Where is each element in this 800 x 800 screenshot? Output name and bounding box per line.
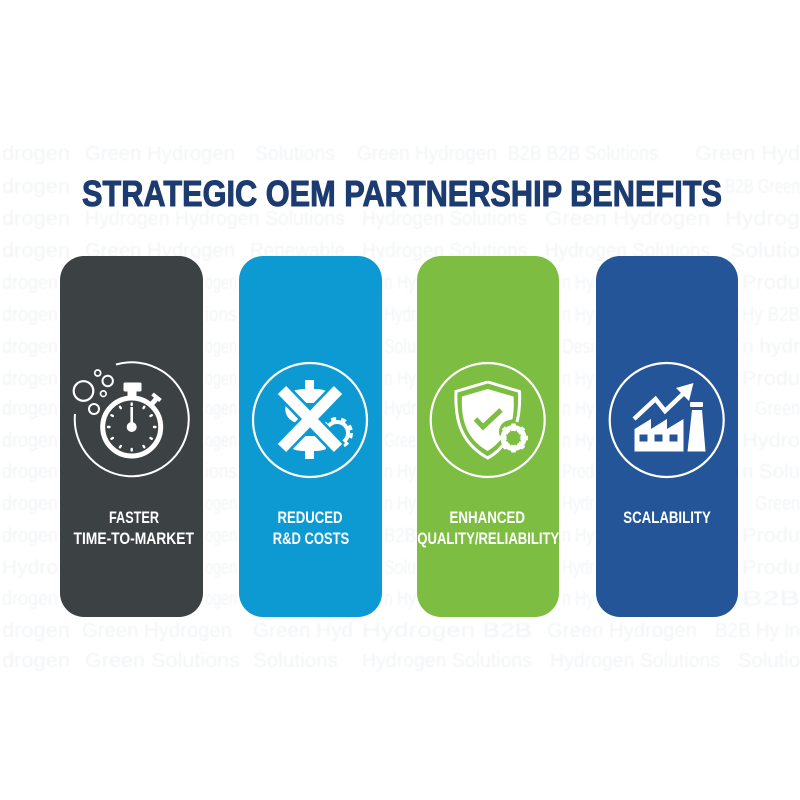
watermark background text: Solutions: [255, 143, 335, 165]
watermark background text: drogen: [2, 304, 58, 326]
watermark background text: n Hy: [562, 525, 594, 547]
watermark background text: n Hy: [384, 588, 416, 610]
watermark background text: Solutio: [738, 650, 800, 672]
label line 2: TIME-TO-MARKET: [74, 530, 194, 548]
watermark background text: n Hy: [562, 304, 594, 326]
watermark background text: drogen: [2, 525, 58, 547]
icon: crossed-out coin and gear: [253, 363, 367, 477]
watermark background text: n Hy: [562, 368, 594, 390]
watermark background text: ogen: [205, 398, 237, 420]
watermark background text: B2B: [742, 588, 800, 610]
watermark background text: Prod: [562, 461, 594, 483]
cross bars outline: [281, 389, 339, 449]
watermark background text: drogen: [2, 336, 58, 358]
panel: scalability: [596, 256, 738, 617]
watermark background text: Green Solutions: [85, 650, 240, 672]
watermark background text: ogen: [205, 272, 237, 294]
label line 2: R&D COSTS: [273, 530, 349, 548]
watermark background text: ogen: [205, 368, 237, 390]
watermark background text: drogen: [2, 368, 58, 390]
watermark background text: Hydrogen Solutions: [362, 208, 527, 230]
watermark background text: Hydrogen Solutions: [550, 650, 720, 672]
watermark background text: ions: [205, 304, 237, 326]
watermark background text: drogen: [2, 240, 70, 262]
watermark background text: Green Hyd: [695, 143, 800, 165]
watermark background text: Hydrogen Hydrogen Solutions: [85, 208, 345, 230]
panel: enhanced quality/reliability: [417, 256, 559, 617]
watermark background text: Hydr: [562, 493, 594, 515]
watermark background text: Hydrogen B2B: [362, 620, 532, 642]
watermark background text: n Solu: [742, 461, 800, 483]
watermark background text: drogen: [2, 143, 70, 165]
card background: dark grey: [60, 256, 203, 617]
watermark background text: ogen: [205, 557, 237, 579]
watermark background text: Green Hydrogen: [82, 620, 232, 642]
watermark background text: drogen: [2, 620, 70, 642]
watermark background text: Gree: [384, 430, 416, 452]
watermark background text: n Hy: [384, 461, 416, 483]
small gear: [323, 419, 351, 447]
watermark background text: Green Hydrogen: [357, 143, 497, 165]
watermark background text: drogen: [2, 650, 70, 672]
icon: factory and rising arrow: [610, 363, 724, 477]
watermark background text: ogen: [205, 430, 237, 452]
icon: shield with check and gear: [431, 363, 545, 477]
label line 2: QUALITY/RELIABILITY: [417, 530, 559, 548]
watermark background text: ogen: [205, 493, 237, 515]
watermark background text: drogen: [2, 272, 58, 294]
watermark background text: Green Hydrogen: [85, 240, 235, 262]
label: ENHANCED: [450, 509, 525, 527]
watermark background text: Produ: [742, 525, 800, 547]
watermark background text: Solutions: [253, 650, 338, 672]
cross bars: [282, 390, 338, 448]
watermark background text: n Hy: [562, 588, 594, 610]
watermark background text: Hydrogen Solutions: [362, 240, 527, 262]
bottom coin piece: [293, 436, 326, 459]
watermark background text: drogen: [2, 176, 70, 198]
label: FASTER: [109, 509, 159, 527]
watermark background text: Hydrogen Solutions: [545, 240, 710, 262]
watermark background text: Hydrogen Solutions: [362, 650, 532, 672]
card background: blue: [239, 256, 382, 617]
watermark background text: Solu: [384, 336, 416, 358]
label: SCALABILITY: [623, 509, 711, 527]
watermark background text: Produ: [742, 368, 800, 390]
card background: green: [417, 256, 559, 617]
watermark background text: Hydro: [2, 557, 58, 579]
watermark background text: drogen: [2, 493, 58, 515]
watermark background text: Hydr: [562, 557, 594, 579]
panel: reduced R&D costs: [239, 256, 382, 617]
watermark background text: [2, 143, 800, 672]
watermark background text: Hydr: [384, 304, 416, 326]
watermark background text: Green Hydrogen: [547, 620, 697, 642]
watermark background text: ogen: [205, 588, 237, 610]
watermark background text: Solu: [384, 557, 416, 579]
watermark background text: n Hy: [384, 368, 416, 390]
watermark background text: B2B B2B Solutions: [508, 143, 658, 165]
left coin piece: [285, 405, 300, 423]
watermark background text: n Hy: [562, 272, 594, 294]
watermark background text: Green Hydrogen: [545, 208, 710, 230]
watermark background text: ogen: [205, 336, 237, 358]
icon: stopwatch with bubbles: [74, 362, 189, 476]
watermark background text: B2B: [384, 525, 416, 547]
watermark background text: Hydrog: [725, 208, 800, 230]
watermark background text: drogen: [2, 461, 58, 483]
watermark background text: Hydro: [742, 430, 800, 452]
watermark background text: Desi: [562, 336, 594, 358]
watermark background text: Green Hydrogen: [85, 143, 235, 165]
watermark background text: ions: [205, 461, 237, 483]
watermark background text: drogen: [2, 588, 58, 610]
watermark background text: n Hy: [562, 430, 594, 452]
watermark background text: Solutio: [730, 240, 800, 262]
label: REDUCED: [278, 509, 343, 527]
watermark background text: Produ: [742, 272, 800, 294]
watermark background text: n hydr: [742, 336, 800, 358]
watermark background text: Renewable: [250, 240, 345, 262]
top coin piece: [293, 380, 326, 403]
watermark background text: n Hy: [384, 493, 416, 515]
watermark background text: drogen: [2, 398, 58, 420]
watermark background text: n Hy: [562, 398, 594, 420]
watermark background text: drogen: [2, 208, 70, 230]
watermark background text: drogen: [2, 430, 58, 452]
panel: faster time-to-market: [60, 256, 203, 617]
watermark background text: Hydr: [384, 398, 416, 420]
watermark background text: n Hy: [384, 272, 416, 294]
watermark background text: Green Hyd: [253, 620, 353, 642]
watermark background text: Produ: [742, 557, 800, 579]
card background: navy blue: [596, 256, 738, 617]
watermark background text: ogen: [205, 525, 237, 547]
